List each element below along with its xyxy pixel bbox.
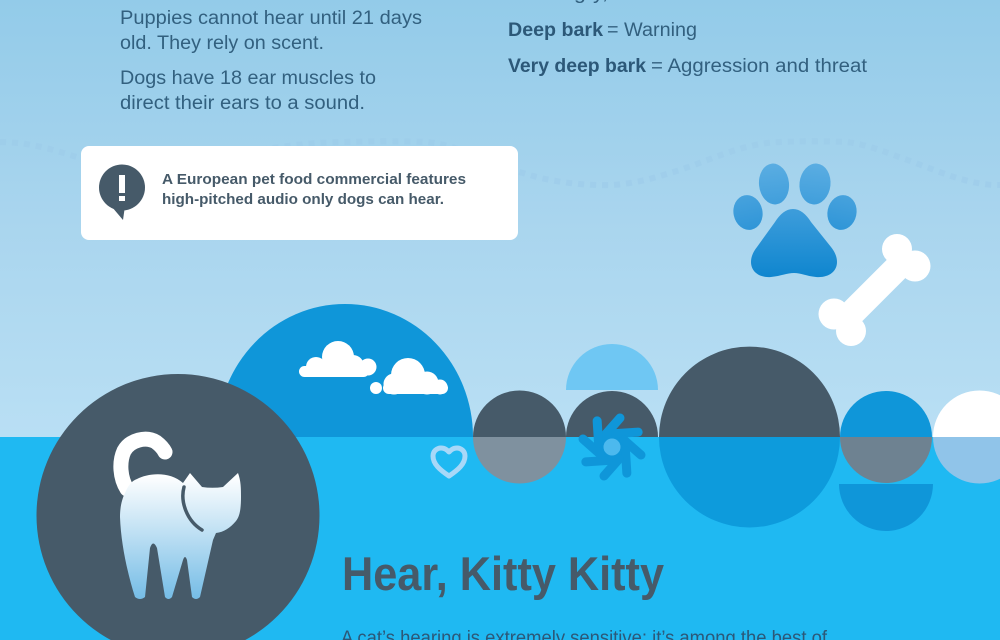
cat badge — [36, 374, 320, 640]
background: water — [0, 437, 1000, 640]
icon: bone — [818, 234, 930, 346]
background: sky — [0, 0, 1000, 437]
callout — [81, 146, 518, 240]
circle: dark half dome — [566, 391, 658, 437]
text block: bark meanings: Very deep bark — [508, 56, 646, 77]
text block: puppy facts: Puppies cannot hear until 21 days — [120, 8, 422, 29]
semicircle: large blue hill — [217, 304, 473, 437]
text block: puppy facts: direct their ears to a sound. — [120, 93, 365, 114]
icon: paw print — [730, 162, 860, 277]
circle: dark with grey reflection — [473, 390, 566, 483]
icon: spinner — [583, 418, 641, 476]
text block: puppy facts — [120, 8, 422, 114]
icon: clouds — [299, 341, 448, 394]
callout text: A European pet food commercial features — [162, 171, 466, 188]
heading: Hear, Kitty Kitty — [342, 547, 664, 600]
circle: white with pale reflection — [933, 390, 1000, 483]
text block: bark meanings — [508, 0, 868, 77]
circle: big dark with blue reflection — [659, 347, 840, 527]
semicircle: blue bowl — [839, 484, 933, 531]
icon: heart — [433, 448, 465, 476]
dotted wave — [0, 141, 1000, 185]
text block: bark meanings: = Warning — [607, 20, 697, 41]
icon: cat — [120, 439, 241, 599]
text block: bark meanings: = Aggression and threat — [651, 56, 868, 77]
text block: puppy facts: Dogs have 18 ear muscles to — [120, 68, 376, 89]
callout text — [162, 171, 466, 208]
semicircle: light blue dome — [566, 344, 658, 390]
text block: bark meanings: Deep bark — [508, 20, 603, 41]
text block: puppy facts: old. They rely on scent. — [120, 33, 324, 54]
circle: blue with grey reflection — [840, 391, 932, 483]
callout text: high-pitched audio only dogs can hear. — [162, 191, 444, 208]
icon: alert bubble — [99, 164, 145, 220]
